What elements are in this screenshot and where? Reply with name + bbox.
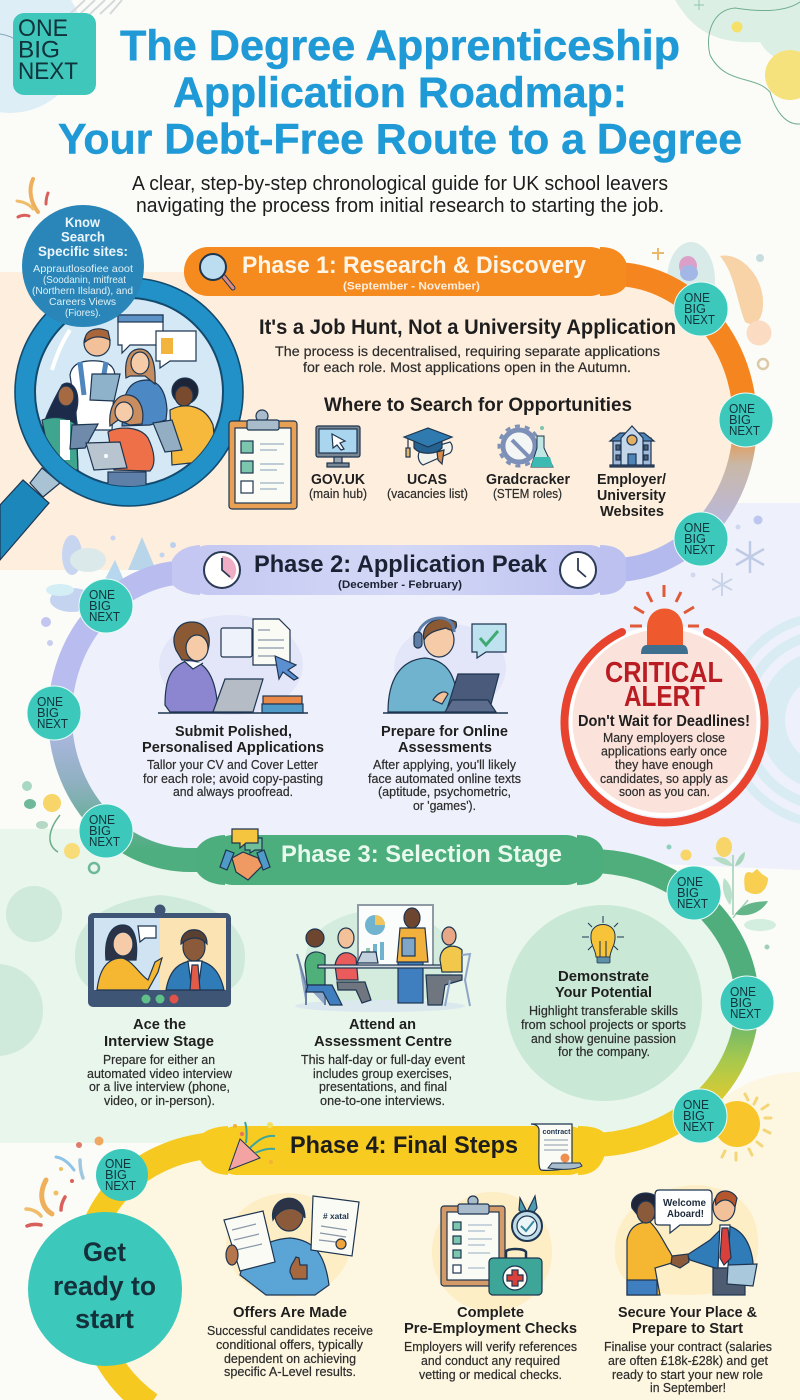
phase 1 intro text (259, 316, 676, 375)
blue info circle: Search (61, 228, 105, 244)
phase 1 intro text: for each role. Most applications open in the Autumn. (303, 359, 631, 375)
illustration: assessment centre (295, 905, 470, 1012)
checks text: Employers will verify references (404, 1339, 577, 1354)
get ready to start circle: Get (83, 1237, 126, 1267)
badge 6: ONE (89, 813, 115, 827)
title: Application Roadmap: (173, 69, 627, 117)
badge 10: BIG (105, 1168, 127, 1182)
badge 10: ONE (105, 1157, 131, 1171)
critical alert callout: applications early once (601, 744, 727, 758)
illustration: offers: # xatal (323, 1212, 349, 1221)
icon: university building (610, 426, 654, 467)
decoration: concentric rings right (726, 616, 800, 824)
icon: contract: contract (542, 1127, 571, 1136)
badge 9: ONE (683, 1098, 709, 1112)
blue info circle: (Northern Ilsland), and (32, 285, 133, 297)
icon: handshake with speech bubbles (220, 829, 270, 880)
badge 3: NEXT (684, 543, 715, 557)
badge 2: BIG (729, 413, 751, 427)
badge 5: NEXT (37, 717, 68, 731)
magnifier handle (0, 468, 60, 560)
checks text: vetting or medical checks. (419, 1367, 562, 1382)
assessment centre text (301, 1016, 465, 1108)
online assessment text: face automated online texts (368, 771, 521, 786)
badge 2: NEXT (729, 424, 760, 438)
badge 4 (79, 579, 133, 633)
illustration: welcome handshake: Welcome (663, 1197, 706, 1209)
badge 5: BIG (37, 706, 59, 720)
interview text: video, or in-person). (104, 1093, 215, 1108)
decoration: snowflakes (690, 516, 764, 596)
subtitle (132, 173, 668, 217)
decoration: right tulips (666, 837, 776, 950)
badge 2: ONE (729, 402, 755, 416)
welcome text: Secure Your Place & (618, 1304, 757, 1321)
phase 1 header: (September - November) (343, 280, 480, 292)
welcome text: ready to start your new role (612, 1367, 763, 1382)
phase 2 header: (December - February) (338, 579, 462, 591)
online assessment text: Assessments (398, 739, 492, 756)
source labels: Websites (600, 504, 664, 520)
source labels: GOV.UK (311, 472, 366, 488)
icon: clock right (560, 552, 596, 588)
badge 8: ONE (730, 985, 756, 999)
badge 10 (96, 1149, 148, 1201)
get ready to start circle: start (75, 1304, 134, 1334)
source labels: (STEM roles) (493, 486, 562, 501)
welcome text: Finalise your contract (salaries (604, 1339, 772, 1354)
badge 7: NEXT (677, 897, 708, 911)
welcome text: are often £18k-£28k) and get (608, 1353, 768, 1368)
interview text: or a live interview (phone, (89, 1079, 230, 1094)
submit application text (142, 723, 324, 799)
source labels: Gradcracker (486, 472, 570, 488)
assessment centre text: includes group exercises, (313, 1066, 452, 1081)
assessment centre text: Assessment Centre (314, 1033, 452, 1050)
badge 4: BIG (89, 599, 111, 613)
magnifier lens and ring (15, 278, 243, 506)
illustration: pre-employment checks (432, 1192, 552, 1312)
critical alert callout (564, 585, 764, 823)
badge 9: BIG (683, 1109, 705, 1123)
panel: demonstrate potential: for the company. (558, 1044, 650, 1059)
phase 3 header: Phase 3: Selection Stage (281, 841, 562, 868)
online assessment text (368, 723, 521, 813)
offers text: Successful candidates receive (207, 1323, 373, 1338)
interview text: Prepare for either an (103, 1052, 215, 1067)
critical alert callout: Don't Wait for Deadlines! (578, 713, 750, 730)
offers text: specific A-Level results. (224, 1364, 356, 1379)
welcome text: in September! (650, 1380, 726, 1395)
interview text: automated video interview (87, 1066, 233, 1081)
assessment centre text: This half-day or full-day event (301, 1052, 465, 1067)
where to search heading: Where to Search for Opportunities (324, 394, 632, 416)
icon: magnifier (200, 254, 233, 288)
interview text: Interview Stage (104, 1033, 214, 1050)
icon: contract (531, 1124, 582, 1170)
blue info circle: Apprautlosofiee aoot (33, 263, 133, 275)
blue info circle: Specific sites: (38, 243, 128, 259)
icon: graduation cap (404, 428, 452, 465)
decoration: top right blobs (675, 0, 800, 124)
badge 7 (667, 866, 721, 920)
submit application text: Submit Polished, (175, 723, 292, 740)
source labels: (vacancies list) (387, 486, 468, 501)
blue info circle: Know (65, 214, 100, 230)
badge 6 (79, 804, 133, 858)
critical alert callout: CRITICAL (605, 657, 723, 689)
badge 5: ONE (37, 695, 63, 709)
source labels: (main hub) (309, 486, 367, 501)
offers text: dependent on achieving (224, 1351, 356, 1366)
welcome text: Prepare to Start (632, 1320, 743, 1337)
panel: demonstrate potential: and show genuine passion (531, 1031, 676, 1046)
interview text: Ace the (133, 1016, 186, 1033)
blue info circle: (Fiores). (65, 307, 101, 319)
badge 7: ONE (677, 875, 703, 889)
badge 8: BIG (730, 996, 752, 1010)
source labels: Employer/ (597, 472, 666, 488)
icon: party popper (229, 1122, 275, 1170)
blue info circle (22, 205, 144, 327)
phase 1 intro text: It's a Job Hunt, Not a University Application (259, 316, 676, 339)
assessment centre text: presentations, and final (319, 1079, 447, 1094)
badge 7: BIG (677, 886, 699, 900)
panel: demonstrate potential: Your Potential (555, 984, 652, 1001)
badge 9: NEXT (683, 1120, 714, 1134)
badge 5 (27, 686, 81, 740)
badge 1: NEXT (684, 313, 715, 327)
online assessment text: After applying, you'll likely (373, 757, 516, 772)
source labels (309, 472, 666, 520)
critical alert callout: they have enough (615, 757, 713, 772)
decoration: left flowers (22, 781, 99, 873)
critical alert callout: candidates, so apply as (600, 771, 728, 786)
get ready to start circle (28, 1212, 182, 1366)
panel: demonstrate potential (506, 905, 702, 1101)
illustration: online assessment (383, 618, 508, 713)
badge 6: BIG (89, 824, 111, 838)
icon: lightbulb (582, 916, 624, 963)
panel: demonstrate potential: Demonstrate (558, 968, 649, 985)
title (58, 22, 742, 164)
critical alert callout: soon as you can. (619, 784, 710, 799)
offers text: Offers Are Made (233, 1304, 347, 1321)
logo: NEXT (18, 58, 78, 85)
subtitle: navigating the process from initial research to starting the job. (136, 195, 664, 217)
students group (40, 315, 214, 492)
submit application text: Tallor your CV and Cover Letter (147, 757, 319, 772)
blue info circle: Careers Views (49, 296, 116, 308)
icon: monitor (316, 426, 360, 467)
badge 10: NEXT (105, 1179, 136, 1193)
icon: gear and flask (499, 426, 553, 467)
illustration: video interview (75, 895, 245, 1007)
submit application text: for each role; avoid copy-pasting (143, 771, 323, 786)
badge 9 (673, 1089, 727, 1143)
offers text: conditional offers, typically (216, 1337, 363, 1352)
checks text: Complete (457, 1304, 524, 1321)
source labels: UCAS (407, 472, 447, 488)
badge 8 (720, 976, 774, 1030)
title: The Degree Apprenticeship (120, 22, 680, 70)
checks text (404, 1304, 577, 1382)
critical alert callout: Many employers close (603, 730, 725, 745)
critical alert callout: ALERT (624, 681, 705, 713)
title: Your Debt-Free Route to a Degree (58, 116, 742, 164)
decoration: top left shapes (0, 0, 122, 113)
decoration: confetti top (17, 179, 48, 217)
checks text: and conduct any required (421, 1353, 560, 1368)
decoration: confetti bottom left (26, 1136, 104, 1226)
submit application text: Personalised Applications (142, 739, 324, 756)
decoration: mint circles (0, 886, 62, 1056)
online assessment text: (aptitude, psychometric, (378, 784, 511, 799)
illustration: welcome handshake (615, 1185, 758, 1295)
phase 1 header (184, 247, 626, 296)
phase 2 header: Phase 2: Application Peak (254, 551, 548, 578)
decoration: phase 1 right blobs (652, 242, 772, 369)
interview text (87, 1016, 233, 1108)
subtitle: A clear, step-by-step chronological guide for UK school leavers (132, 173, 668, 195)
phase 1 intro text: The process is decentralised, requiring separate applications (275, 343, 660, 359)
badge 1 (674, 282, 728, 336)
panel: demonstrate potential: from school projects or sports (521, 1017, 686, 1032)
icon: siren (630, 585, 699, 654)
submit application text: and always proofread. (173, 784, 293, 799)
phase 4 header: Phase 4: Final Steps (290, 1132, 518, 1159)
phase 2 header (172, 545, 626, 595)
logo: ONE (18, 15, 68, 42)
phase 4 header (200, 1122, 604, 1175)
illustration: welcome handshake: Aboard! (667, 1208, 704, 1220)
assessment centre text: one-to-one interviews. (320, 1093, 445, 1108)
panel: demonstrate potential: Highlight transferable skills (529, 1003, 678, 1018)
source labels: University (597, 488, 666, 504)
roadmap path (60, 274, 747, 1400)
assessment centre text: Attend an (349, 1016, 416, 1033)
icon: clock left (204, 552, 240, 588)
badge 4: NEXT (89, 610, 120, 624)
badge 1: ONE (684, 291, 710, 305)
badge 2 (719, 393, 773, 447)
phase 3 header (197, 829, 603, 885)
badge 1: BIG (684, 302, 706, 316)
badge 3: BIG (684, 532, 706, 546)
logo (13, 13, 96, 95)
online assessment text: Prepare for Online (381, 723, 508, 740)
illustration: submit application (158, 615, 308, 715)
icon: clipboard checklist (229, 410, 297, 509)
online assessment text: or 'games'). (413, 798, 476, 813)
offers text (207, 1304, 373, 1379)
phase 1 header: Phase 1: Research & Discovery (242, 252, 587, 279)
magnifying glass with students (0, 278, 243, 560)
checks text: Pre-Employment Checks (404, 1320, 577, 1337)
badge 4: ONE (89, 588, 115, 602)
decoration: winter scene left (41, 535, 176, 646)
badge 6: NEXT (89, 835, 120, 849)
logo: BIG (18, 36, 60, 64)
get ready to start circle: ready to (53, 1271, 156, 1301)
illustration: offers (224, 1193, 359, 1297)
badge 3: ONE (684, 521, 710, 535)
icon: sun (714, 1094, 771, 1160)
welcome text (604, 1304, 772, 1395)
blue info circle: (Soodanin, mitfreat (43, 274, 126, 286)
badge 3 (674, 512, 728, 566)
badge 8: NEXT (730, 1007, 761, 1021)
badges along the path (27, 282, 774, 1201)
